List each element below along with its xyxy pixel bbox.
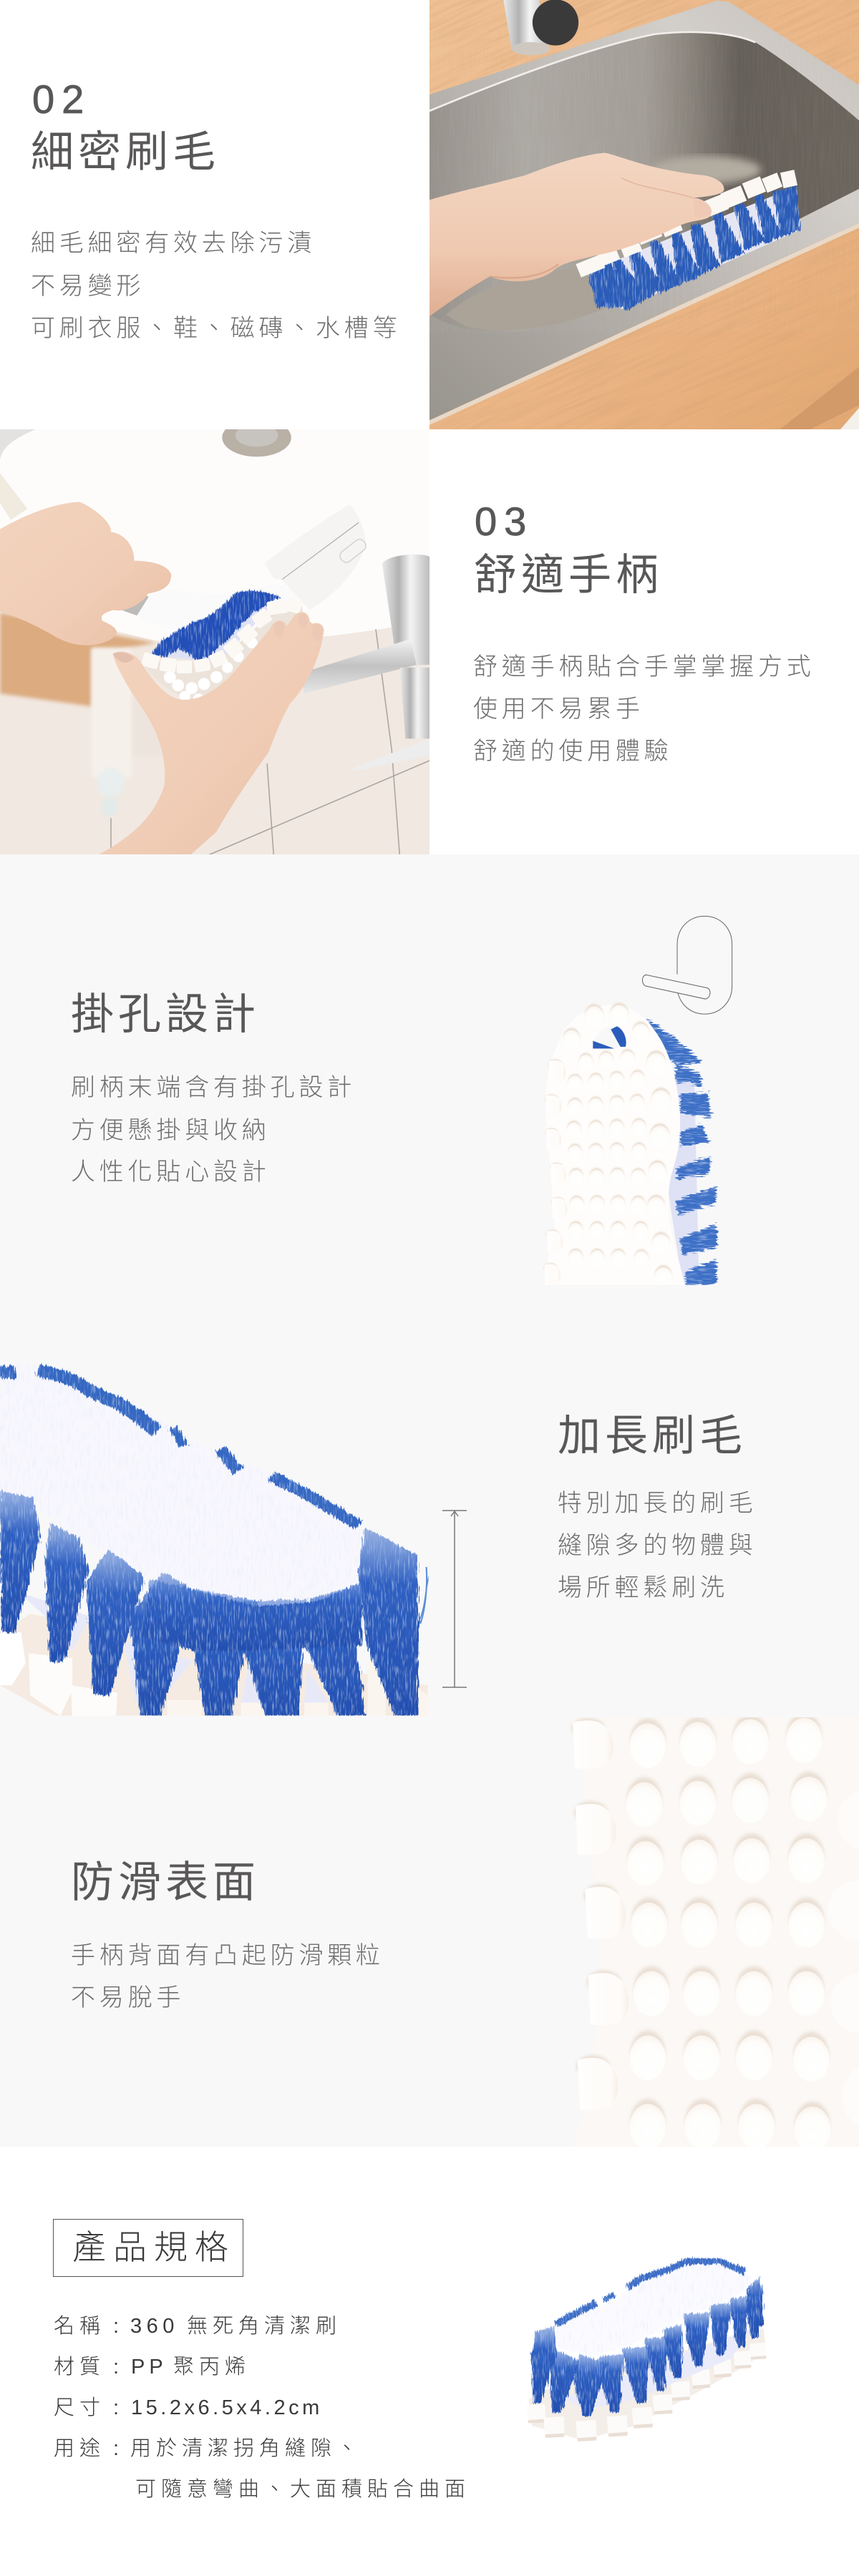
heading box: product specs: 產品規格 [72, 2228, 236, 2266]
blue edge of bristles top [0, 1370, 359, 1525]
heading: fine bristles: 細密刷毛 [31, 128, 220, 176]
arrow: bristle length dimension line [442, 1510, 467, 1688]
drain [222, 429, 291, 457]
spec: name: 360 [130, 2315, 179, 2338]
heading: long bristles: 加長刷毛 [558, 1412, 747, 1460]
spec: size: 尺寸 [54, 2396, 105, 2419]
body text: fine bristles: 可刷衣服、鞋、磁磚、水槽等 [31, 315, 401, 342]
body text: comfortable handle: 使用不易累手 [473, 696, 644, 723]
heading: hanging hole: 掛孔設計 [71, 990, 260, 1038]
spec: material: 材質 [54, 2356, 105, 2379]
brush in sink [576, 170, 800, 311]
body text: long bristles: 場所輕鬆刷洗 [558, 1574, 729, 1601]
spec: name: 無死角清潔刷 [187, 2315, 341, 2338]
body text: hanging hole: 人性化貼心設計 [71, 1158, 271, 1186]
spec: usage: 用於清潔拐角縫隙、 [130, 2437, 362, 2460]
photo: hand scrubbing kitchen sink with brush [430, 0, 859, 429]
handle body with bumps [539, 1002, 721, 1302]
body text: fine bristles: 細毛細密有效去除污漬 [31, 230, 316, 257]
section number 03: 03 [475, 499, 533, 544]
panel: feature 03 comfortable handle [0, 429, 815, 854]
icon: faucet [503, 0, 578, 55]
heading: anti-slip surface: 防滑表面 [71, 1858, 260, 1906]
hands [0, 502, 324, 859]
blue bristle edge [556, 2261, 744, 2324]
panel: grey feature background [0, 854, 859, 2147]
photo: close-up of long bristles [0, 1363, 429, 1716]
brush under hand [141, 590, 303, 705]
spec: material: PP [131, 2356, 168, 2379]
spec: name: : [113, 2315, 124, 2338]
body text: hanging hole [71, 1074, 356, 1186]
faucet [301, 555, 430, 771]
icon: wall hook outline [642, 916, 732, 1014]
heading box: product specs [53, 2219, 243, 2277]
hand [430, 153, 724, 316]
spec: size: 15.2x6.5x4.2cm [131, 2396, 323, 2419]
body text: hanging hole: 方便懸掛與收納 [71, 1117, 271, 1144]
body text: fine bristles: 不易變形 [31, 273, 145, 300]
hose and shower head [0, 474, 367, 615]
photo: anti-slip bumps close-up [571, 1717, 831, 2127]
spec: usage continued: 可隨意彎曲、大面積貼合曲面 [135, 2478, 470, 2501]
white bristle top [6, 1410, 345, 1584]
panel: feature 02 fine bristles [31, 0, 859, 429]
body text: comfortable handle [473, 653, 815, 765]
bristles side [646, 1019, 717, 1285]
spec: material [54, 2356, 251, 2379]
spec: size: : [113, 2396, 124, 2419]
spec: material: : [113, 2356, 124, 2379]
body text: anti-slip surface: 不易脫手 [71, 1984, 185, 2011]
body text: long bristles: 特別加長的刷毛 [558, 1490, 757, 1517]
brush base [527, 2328, 767, 2441]
blue bristle tufts [0, 1491, 419, 1716]
panel: product specifications [0, 2147, 859, 2576]
body text: comfortable handle: 舒適手柄貼合手掌掌握方式 [473, 653, 815, 680]
heading: comfortable handle: 舒適手柄 [474, 551, 663, 599]
body text: long bristles [558, 1490, 757, 1601]
spec: name [54, 2315, 341, 2338]
body text: hanging hole: 刷柄末端含有掛孔設計 [71, 1074, 356, 1101]
body text: fine bristles [31, 230, 401, 342]
body text: comfortable handle: 舒適的使用體驗 [473, 738, 673, 765]
product photo: brush [528, 2256, 766, 2441]
spec: usage: : [113, 2437, 124, 2460]
spec: usage: 用途 [54, 2437, 105, 2460]
spec: name: 名稱 [54, 2315, 105, 2338]
white bristles [553, 2261, 750, 2356]
body text: anti-slip surface: 手柄背面有凸起防滑顆粒 [71, 1942, 384, 1969]
illustration: brush back with hanging hole and wall hook [543, 916, 733, 1285]
brush base blocks [0, 1614, 429, 1716]
body text: anti-slip surface [71, 1942, 384, 2011]
section number 02: 02 [32, 77, 91, 122]
blue tufts [531, 2277, 764, 2416]
photo: hand scrubbing bathroom sink and shower head [0, 429, 430, 854]
spec: material: 聚丙烯 [173, 2356, 251, 2379]
body text: long bristles: 縫隙多的物體與 [558, 1532, 757, 1559]
